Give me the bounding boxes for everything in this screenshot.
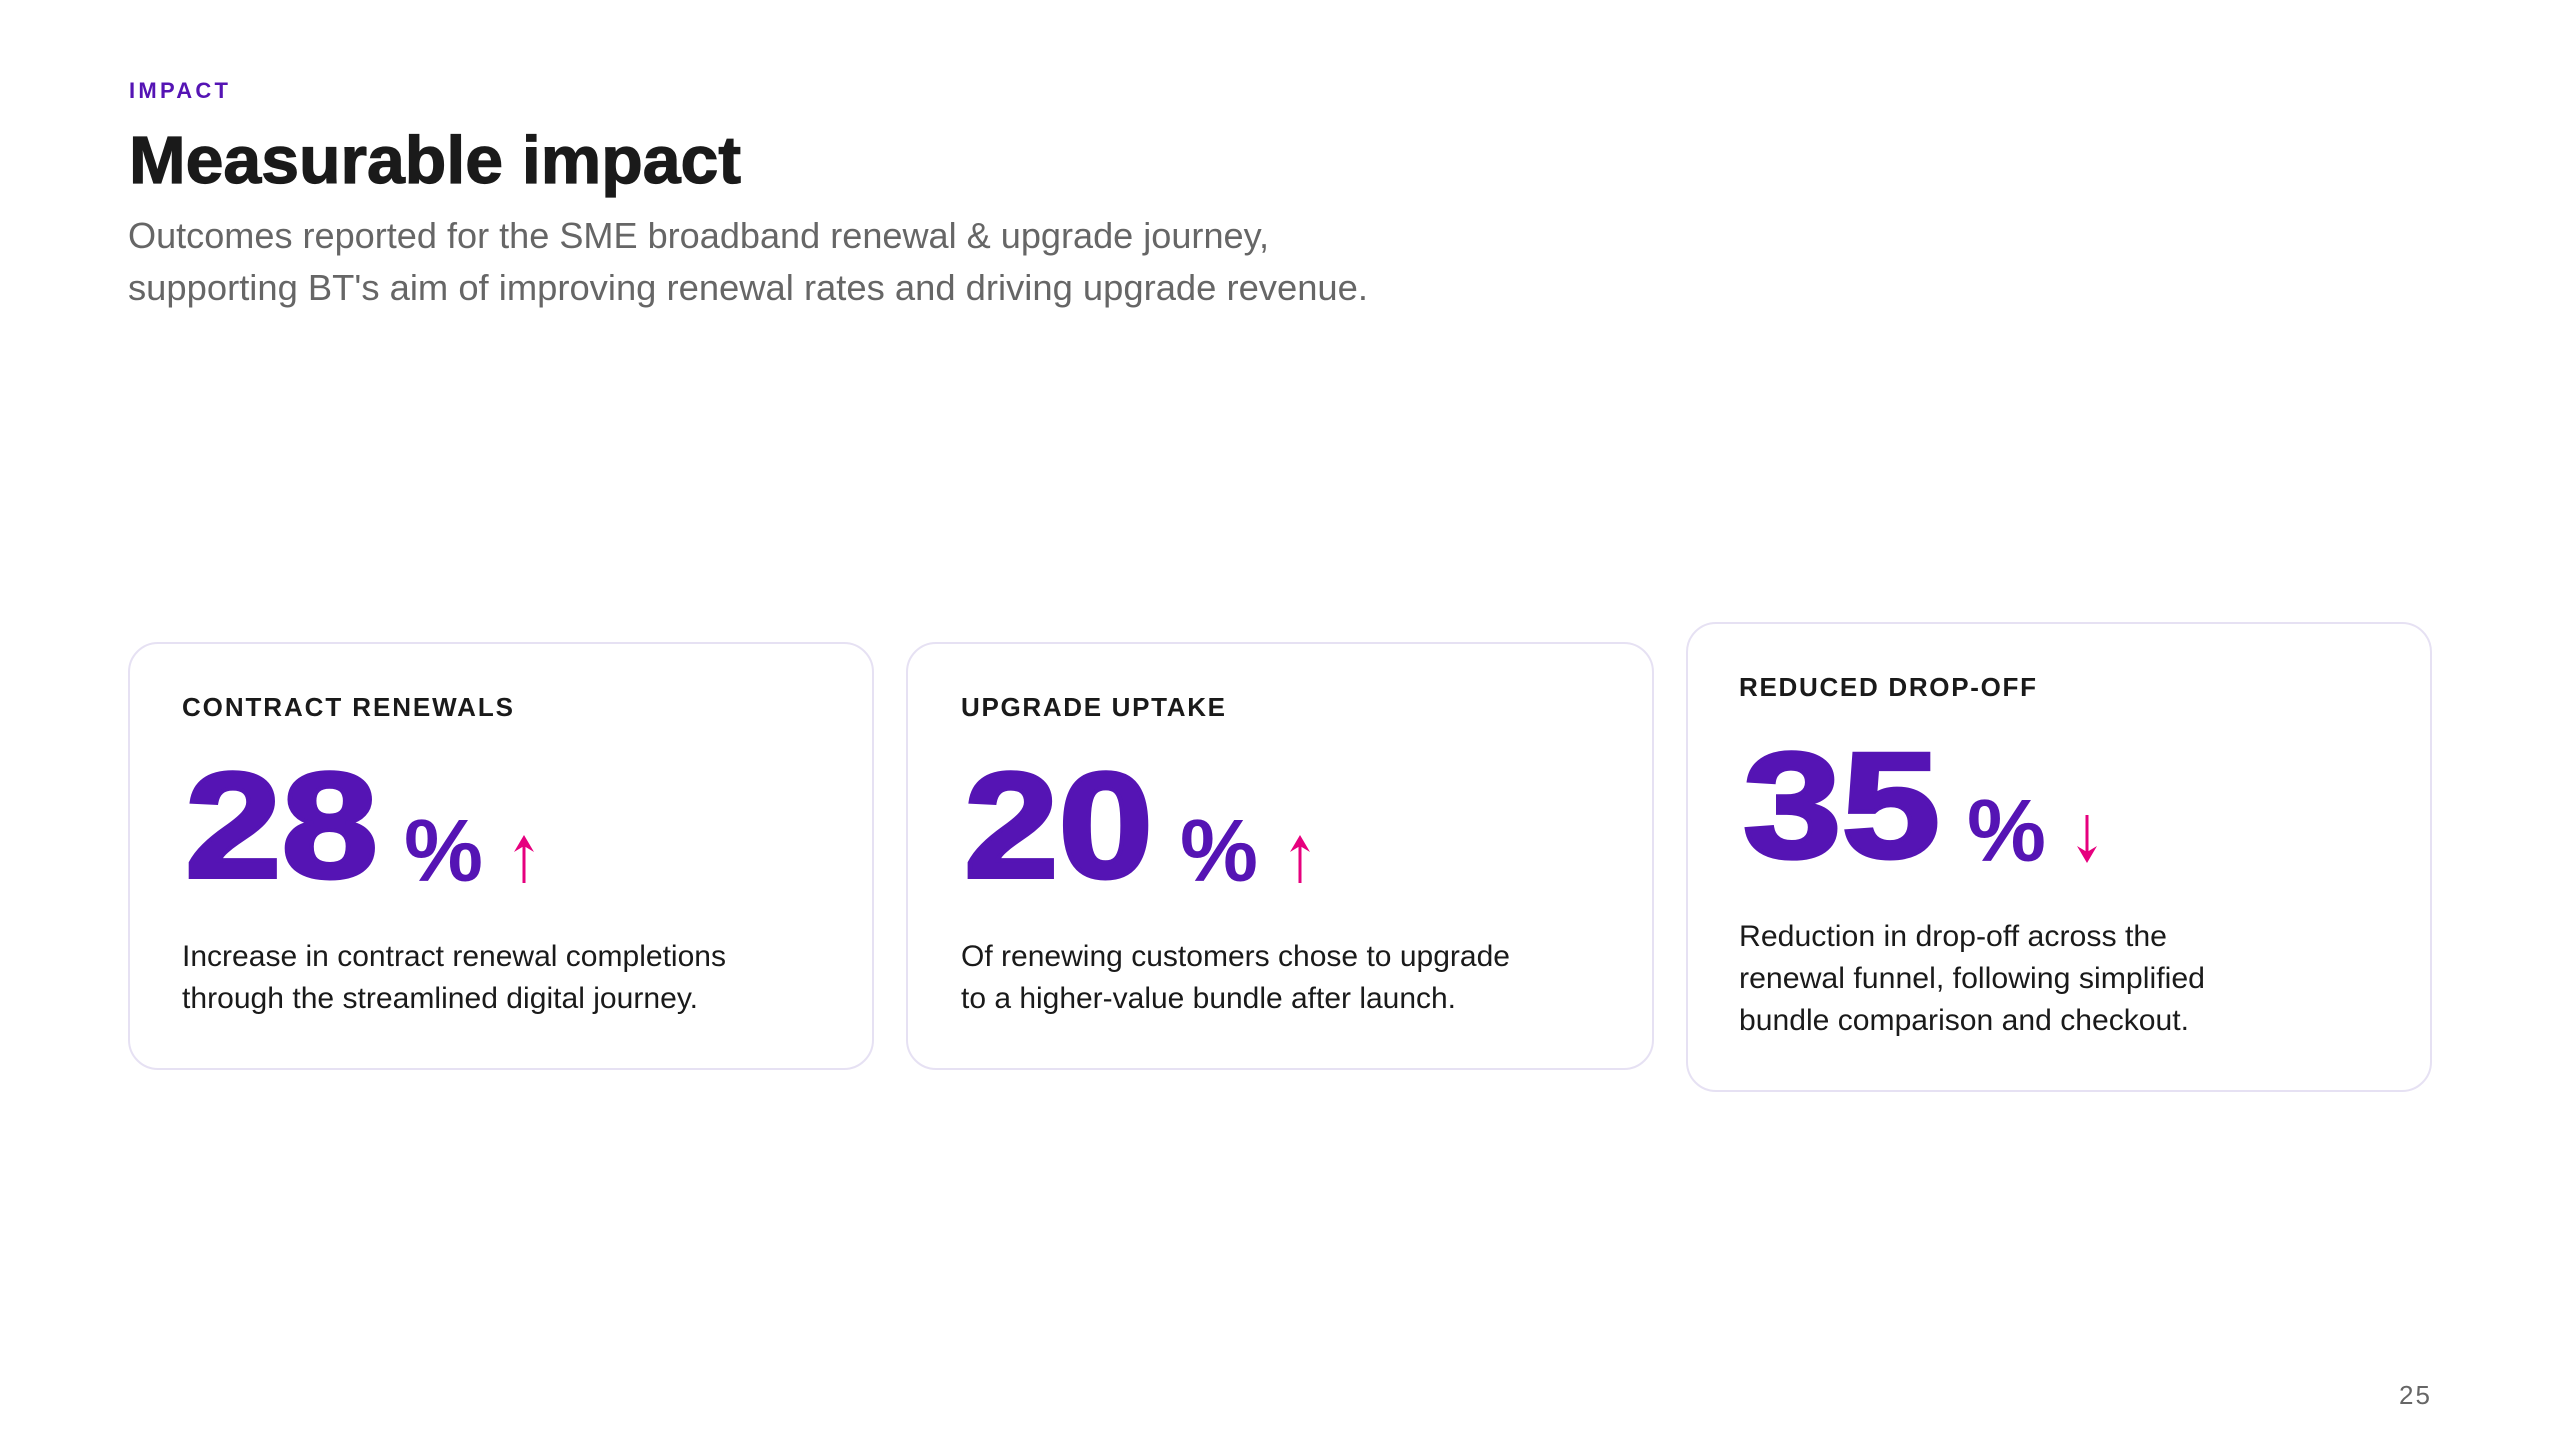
card heading: REDUCED DROP-OFF xyxy=(1739,672,2036,702)
eyebrow label: IMPACT xyxy=(129,78,229,103)
panel: contract renewals xyxy=(129,643,873,1069)
percent sign: % xyxy=(1180,801,1258,900)
percent sign: % xyxy=(404,801,483,900)
card description: bundle comparison and checkout. xyxy=(1739,1004,2189,1037)
card description xyxy=(1739,920,2205,1037)
metric value: 28 xyxy=(185,741,378,909)
card description: renewal funnel, following simplified xyxy=(1739,962,2205,995)
card heading: CONTRACT RENEWALS xyxy=(182,692,513,722)
icon: up arrow xyxy=(514,835,534,883)
card description: through the streamlined digital journey. xyxy=(182,982,698,1015)
metric value: 20 xyxy=(964,741,1153,909)
title: Measurable impact xyxy=(129,123,741,198)
subtitle xyxy=(128,215,1368,308)
subtitle: supporting BT's aim of improving renewal rates and driving upgrade revenue. xyxy=(128,267,1368,308)
card heading: UPGRADE UPTAKE xyxy=(961,692,1225,722)
metric value: 35 xyxy=(1743,721,1940,889)
panel: reduced drop-off xyxy=(1687,623,2431,1091)
card description xyxy=(961,940,1510,1015)
card description: Of renewing customers chose to upgrade xyxy=(961,940,1510,973)
percent sign: % xyxy=(1967,781,2046,880)
panel: upgrade uptake xyxy=(907,643,1653,1069)
card description: Increase in contract renewal completions xyxy=(182,940,726,973)
icon: up arrow xyxy=(1290,835,1310,883)
page number: 25 xyxy=(2399,1380,2430,1410)
card description: Reduction in drop-off across the xyxy=(1739,920,2167,953)
card description xyxy=(182,940,726,1015)
card description: to a higher-value bundle after launch. xyxy=(961,982,1456,1015)
subtitle: Outcomes reported for the SME broadband renewal & upgrade journey, xyxy=(128,215,1269,256)
icon: down arrow xyxy=(2077,815,2097,863)
